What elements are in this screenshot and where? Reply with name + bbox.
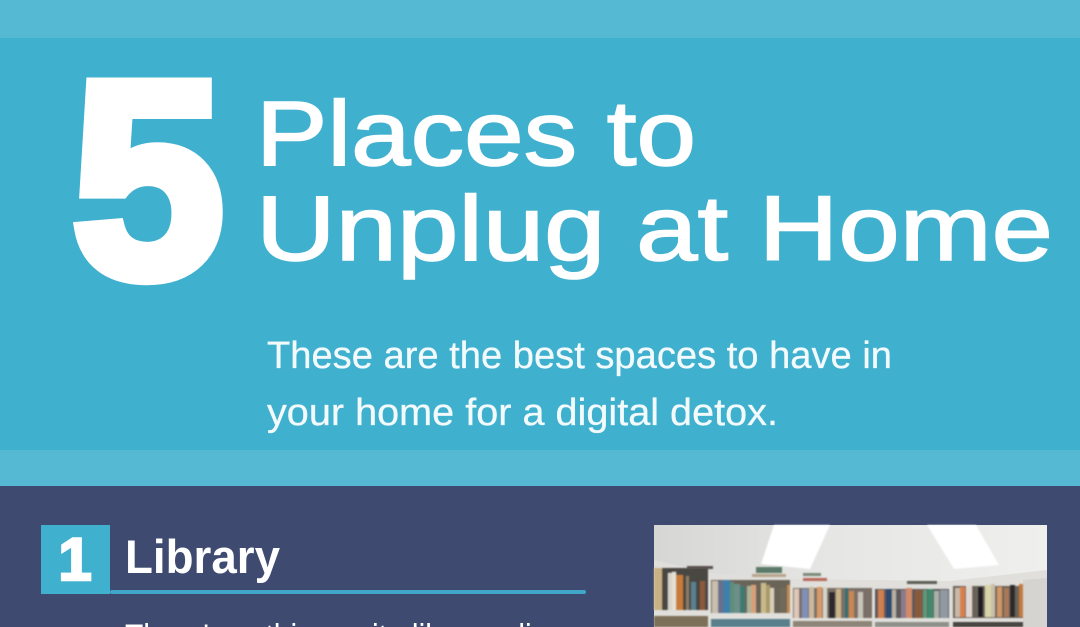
lower shelf row [654, 616, 1023, 627]
heading text: Library [125, 530, 280, 583]
title: Places to [256, 83, 696, 185]
subtitle: These are the best spaces to have in [267, 335, 892, 377]
title: Unplug at Home [256, 178, 1053, 280]
number badge [41, 525, 110, 594]
title [256, 83, 1053, 280]
section heading: 1 Library [41, 525, 586, 594]
book rows [654, 568, 1023, 618]
header panel [0, 0, 1080, 486]
big numeral 5: 5 [72, 24, 224, 336]
number badge: 1 [58, 526, 92, 593]
heading underline [110, 590, 586, 594]
books on top of shelves [687, 566, 937, 584]
section panel: library [0, 486, 1080, 627]
subtitle: your home for a digital detox. [267, 392, 778, 434]
photo: curved bookshelves under skylights [654, 525, 1047, 627]
shelf unit [654, 560, 1047, 627]
skylights [761, 525, 830, 569]
subtitle [267, 335, 892, 434]
